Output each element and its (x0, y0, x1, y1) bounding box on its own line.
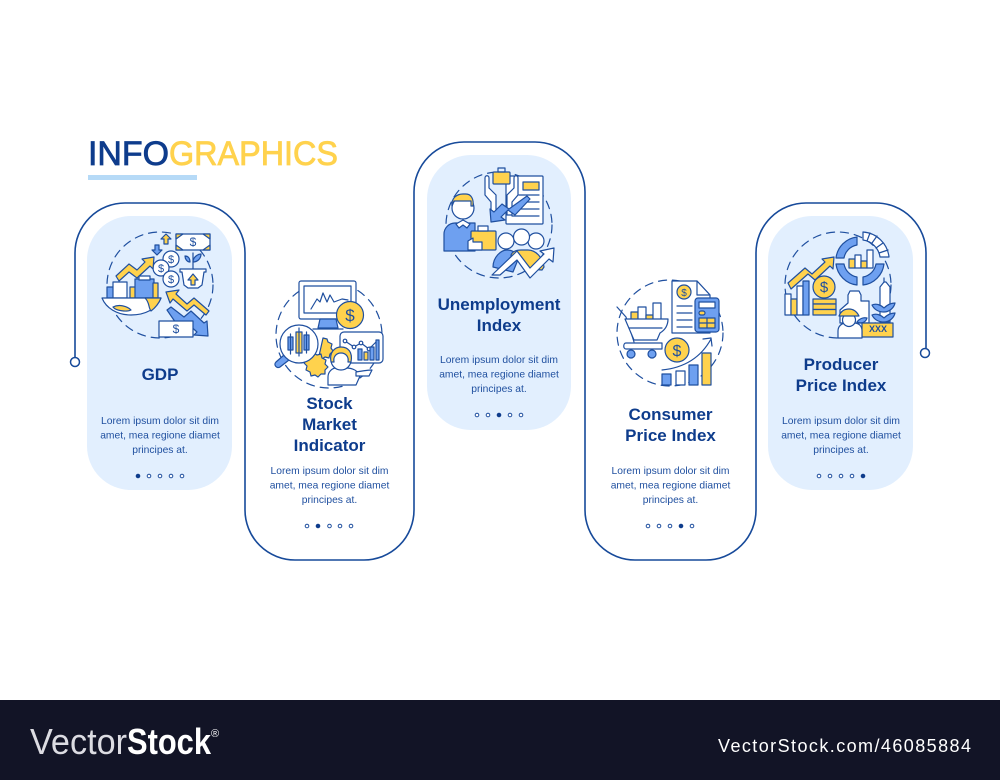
heading: Producer Price Index: Price Index (796, 376, 887, 395)
heading: Stock Market Indicator: Stock (306, 394, 353, 413)
icon: Consumer: $ (673, 343, 682, 360)
icon: Consumer: $ (681, 288, 687, 299)
text block: Producer: principes at. (813, 445, 869, 456)
footer logo (30, 721, 219, 762)
icon: Producer: $ (820, 279, 829, 296)
icon: GDP: $ (168, 254, 174, 266)
icon: Stock: $ (345, 306, 355, 325)
panel: Stock Market Indicator (270, 281, 389, 528)
pagination: Stock (305, 524, 353, 528)
panel: GDP (87, 216, 232, 490)
text block: Consumer: amet, mea regione diamet (611, 480, 730, 492)
footer logo: ® (211, 728, 219, 740)
heading: Consumer Price Index: Price Index (625, 426, 716, 445)
icon: Producer (785, 232, 895, 338)
heading: GDP: GDP (142, 365, 178, 384)
pagination: Consumer (646, 524, 694, 528)
icon: GDP: $ (190, 235, 197, 249)
text block: Stock: principes at. (302, 495, 357, 506)
title: GRAPHICS (169, 135, 338, 173)
text block: GDP: Lorem ipsum dolor sit dim (101, 416, 219, 427)
pagination: Unemployment (475, 413, 523, 417)
heading: Stock Market Indicator: Market (302, 415, 357, 434)
pagination: GDP (136, 474, 184, 478)
panel: Unemployment Index (427, 155, 571, 430)
text block: Producer: Lorem ipsum dolor sit dim (782, 416, 900, 427)
icon: GDP: $ (158, 263, 164, 275)
panel: Consumer Price Index (611, 280, 730, 528)
icon: Stock (275, 281, 383, 388)
heading: Stock Market Indicator: Indicator (294, 436, 366, 455)
text block: Unemployment: amet, mea regione diamet (439, 370, 559, 380)
text block: Consumer: principes at. (643, 495, 698, 506)
timeline outline (70, 142, 930, 560)
text block: Stock: amet, mea regione diamet (270, 480, 389, 492)
heading: Producer Price Index: Producer (804, 355, 879, 374)
heading: Unemployment Index: Unemployment (438, 295, 561, 314)
footer logo: Stock (127, 721, 212, 762)
icon: Producer: XXX (869, 324, 887, 334)
icon: Consumer (617, 280, 723, 386)
text block: GDP: principes at. (132, 445, 188, 456)
text block: Unemployment: Lorem ipsum dolor sit dim (440, 355, 558, 366)
text block: GDP: amet, mea regione diamet (100, 430, 220, 442)
text block: Stock: Lorem ipsum dolor sit dim (271, 466, 388, 477)
title (88, 135, 338, 180)
icon: GDP: $ (168, 274, 174, 286)
text block: Producer: amet, mea regione diamet (781, 430, 901, 442)
panel: Producer Price Index (768, 216, 913, 490)
text block: Consumer: Lorem ipsum dolor sit dim (612, 466, 729, 477)
footer id: VectorStock.com/46085884 (718, 736, 971, 756)
heading: Unemployment Index: Index (477, 316, 522, 335)
icon: GDP (102, 232, 213, 338)
pagination: Producer (817, 474, 865, 478)
icon: Unemployment (444, 168, 554, 278)
icon: GDP: $ (173, 322, 180, 336)
footer bar (0, 700, 1000, 780)
footer logo: Vector (30, 721, 127, 762)
title: INFO (88, 135, 169, 173)
heading: Consumer Price Index: Consumer (628, 405, 713, 424)
text block: Unemployment: principes at. (471, 384, 527, 395)
